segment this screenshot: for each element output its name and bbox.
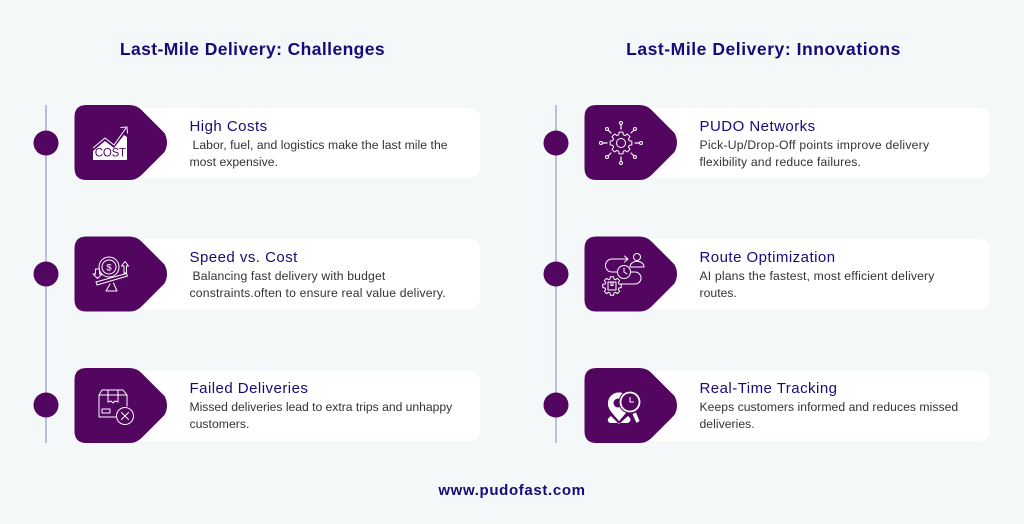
- heading: high costs: High Costs: [190, 118, 268, 135]
- text: route optimization: routes.: [700, 286, 737, 300]
- panel: route optimization: [584, 236, 990, 312]
- timeline: challenges: [34, 105, 58, 443]
- icon: route with clock: [603, 254, 644, 295]
- text: speed vs cost: constraints.often to ensure real value delivery.: [190, 286, 446, 300]
- icon: cost chart: COST: [95, 148, 126, 160]
- text: real-time tracking: Keeps customers informed and reduces missed: [700, 400, 958, 414]
- text: high costs: most expensive.: [190, 155, 278, 169]
- text: high costs: Labor, fuel, and logistics make the last mile the: [192, 138, 448, 152]
- text: failed deliveries: customers.: [190, 417, 249, 431]
- title: challenges: Last-Mile Delivery: Challenges: [120, 39, 385, 59]
- heading: failed deliveries: Failed Deliveries: [190, 380, 308, 397]
- footer: website: www.pudofast.com: [437, 482, 586, 499]
- heading: real-time tracking: Real-Time Tracking: [700, 380, 837, 397]
- heading: speed vs cost: Speed vs. Cost: [190, 249, 298, 266]
- heading: pudo networks: PUDO Networks: [700, 118, 816, 135]
- text: speed vs cost: Balancing fast delivery with budget: [192, 269, 386, 283]
- icon: balance with coin: $: [106, 262, 112, 274]
- heading: route optimization: Route Optimization: [700, 249, 836, 266]
- panel: high costs: [74, 105, 480, 180]
- icon: balance with coin: [93, 257, 128, 291]
- icon: map pin with magnifier: [608, 390, 642, 424]
- panel: pudo networks: [584, 105, 990, 180]
- icon: gear network: [600, 122, 642, 164]
- panel: real-time tracking: [584, 368, 990, 443]
- panel: speed vs cost: [74, 236, 480, 312]
- text: route optimization: AI plans the fastest, most efficient delivery: [700, 269, 935, 283]
- timeline: innovations: [544, 105, 568, 443]
- text: real-time tracking: deliveries.: [700, 417, 755, 431]
- text: failed deliveries: Missed deliveries lead to extra trips and unhappy: [190, 400, 453, 414]
- text: pudo networks: Pick-Up/Drop-Off points improve delivery: [700, 138, 930, 152]
- icon: box with x: [99, 390, 134, 424]
- text: pudo networks: flexibility and reduce failures.: [700, 155, 861, 169]
- title: innovations: Last-Mile Delivery: Innovations: [626, 39, 901, 59]
- icon: cost chart: [93, 127, 128, 160]
- panel: failed deliveries: [74, 368, 480, 443]
